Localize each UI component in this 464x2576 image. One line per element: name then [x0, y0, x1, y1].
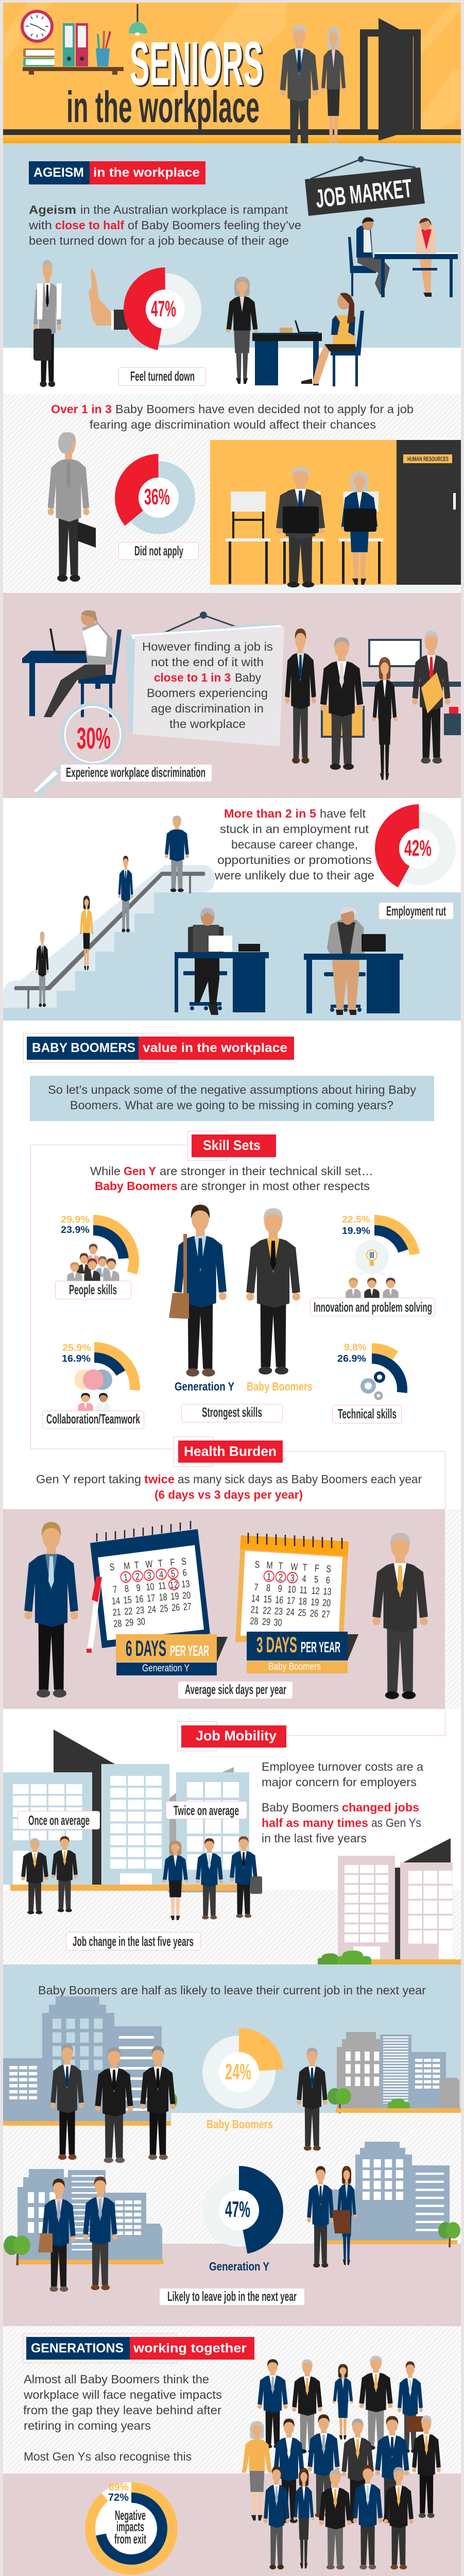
icon: stop hand — [89, 269, 128, 330]
text: ageism intro — [28, 203, 301, 247]
label: once on average: Once on average — [28, 1812, 90, 1828]
text: half as likely: Baby Boomers are half as likely to leave their current job in the next year — [38, 1984, 426, 1997]
calendar: baby boomers: S — [326, 1563, 332, 1574]
people climbing stairs — [36, 816, 189, 1007]
calendar: baby boomers: M — [266, 1560, 273, 1571]
panel: baby boomers value and skills — [3, 1021, 461, 1735]
scene: woman working at desk — [175, 908, 269, 1015]
text: note: close to 1 in 3 — [154, 671, 231, 684]
donut: negative impacts — [85, 2482, 178, 2575]
people: gen y pair — [38, 2176, 117, 2292]
calendar: gen y: F — [170, 1557, 175, 1568]
calendar: baby boomers: 20 — [322, 1597, 331, 1608]
heading: ageism — [26, 158, 205, 188]
calendar: gen y: 20 — [182, 1589, 191, 1601]
label: likely to leave — [160, 2289, 305, 2305]
calendar: baby boomers: 15 — [263, 1594, 272, 1605]
icon: wall clock — [22, 11, 52, 41]
calendar: gen y: 8 — [124, 1583, 129, 1595]
text: note: Baby — [235, 671, 261, 684]
text: more than 2 in 5: were unlikely due to their age — [214, 869, 374, 882]
label: people skills: People skills — [69, 1282, 117, 1297]
calendar: gen y: 21 — [112, 1606, 122, 1618]
calendar: baby boomers: 13 — [323, 1586, 332, 1597]
calendar: baby boomers: 22 — [263, 1605, 271, 1616]
calendar: gen y: 12 — [169, 1579, 178, 1591]
text: generations gap: Almost all Baby Boomers think the — [24, 2372, 209, 2386]
label: technical skills — [333, 1405, 402, 1423]
text: turnover: in the last five years — [262, 1832, 367, 1845]
text: generation legends: Generation Y — [175, 1380, 234, 1393]
heading: baby boomers — [24, 1033, 294, 1062]
calendar: baby boomers: T — [302, 1562, 307, 1573]
text: ageism intro: of Baby Boomers feeling they’ve — [128, 218, 301, 232]
heading: skill sets: Skill Sets — [203, 1138, 261, 1153]
text: sick days — [36, 1472, 422, 1501]
text: sick days: (6 days vs 3 days per year) — [154, 1488, 303, 1501]
label: experience workplace discrimination — [61, 765, 212, 782]
chart: technical skills: 9.8% — [344, 1342, 367, 1352]
scene: waiting room — [210, 440, 461, 593]
banner: 3 days per year — [247, 1632, 358, 1673]
icon: idea bulb — [355, 1240, 389, 1276]
panel: header: SENIORS — [131, 30, 265, 100]
text: sick days: twice — [144, 1472, 175, 1486]
calendar: gen y: M — [123, 1560, 130, 1572]
buildings: pink — [318, 1838, 461, 1964]
text: more than 2 in 5: More than 2 in 5 — [224, 807, 316, 820]
figure: gen y man — [24, 1522, 78, 1698]
text: turnover: major concern for employers — [262, 1775, 417, 1789]
calendar: gen y: 23 — [135, 1605, 145, 1616]
calendar: baby boomers: 12 — [311, 1585, 320, 1597]
figure: baby boomer — [246, 1208, 300, 1375]
donut: negative impacts: impacts — [116, 2519, 144, 2534]
chart: technical skills: 26.9% — [337, 1353, 366, 1364]
donut: 24 percent: 24% — [225, 2059, 251, 2084]
donut: 42 percent: 42% — [404, 836, 432, 861]
label: experience workplace discrimination: Experience workplace discrimination — [66, 765, 205, 780]
banner: 6 days per year: 6 DAYS — [126, 1636, 166, 1661]
text: note — [142, 640, 273, 731]
figure: generation y — [169, 1205, 227, 1377]
calendar: gen y: S — [109, 1562, 115, 1573]
calendar: gen y: 25 — [160, 1603, 168, 1614]
calendar: gen y: 3 — [147, 1570, 152, 1581]
text box: unpack assumptions: Boomers. What are we going to be missing in coming years? — [70, 1098, 393, 1112]
banner: 6 days per year: Generation Y — [142, 1663, 190, 1674]
banner: 3 days per year: 3 DAYS — [256, 1633, 297, 1657]
label: collaboration — [42, 1411, 144, 1428]
label: people skills — [56, 1281, 131, 1299]
text: generation y legend: Generation Y — [209, 2260, 269, 2273]
text: generations gap: from the gap they leave behind after — [23, 2403, 221, 2417]
text: turnover: as Gen Ys — [371, 1816, 421, 1829]
chart: people skills: 23.9% — [61, 1225, 90, 1235]
icon: three colleagues — [346, 1278, 399, 1298]
text: over 1 in 3: Baby Boomers have even decided not to apply for a job — [115, 402, 414, 416]
man walking away — [48, 432, 96, 582]
text: ageism intro: with — [28, 218, 52, 232]
heading: ageism: in the workplace — [93, 165, 200, 180]
label: did not apply — [118, 542, 199, 560]
calendar: gen y: 14 — [111, 1595, 121, 1607]
calendar: baby boomers: 27 — [321, 1608, 330, 1620]
text: note: However finding a job is — [142, 640, 273, 653]
calendar: baby boomers: 1 — [267, 1571, 271, 1582]
calendar: baby boomers: 7 — [254, 1582, 259, 1593]
man with briefcase — [33, 260, 62, 387]
calendar: gen y: W — [145, 1558, 153, 1570]
donut: 36 percent: 36% — [144, 484, 170, 510]
people: boomers walking — [21, 1836, 78, 1914]
label: likely to leave: Likely to leave job in the next year — [167, 2289, 297, 2304]
text: generations gap — [23, 2372, 222, 2463]
calendar: baby boomers: 10 — [287, 1584, 296, 1595]
heading: job mobility: Job Mobility — [196, 1728, 277, 1743]
title — [66, 28, 265, 132]
label: did not apply: Did not apply — [134, 543, 183, 558]
calendar: gen y: 28 — [113, 1618, 122, 1630]
people: gen y conversing — [307, 2166, 356, 2267]
calendar: gen y: 18 — [159, 1591, 167, 1603]
banner: 6 days per year: PER YEAR — [170, 1643, 209, 1659]
text: ageism intro: close to half — [55, 218, 124, 232]
calendar: baby boomers: 21 — [250, 1604, 259, 1616]
calendar: baby boomers: 14 — [251, 1593, 260, 1604]
label: average sick days: Average sick days per year — [185, 1682, 286, 1697]
label: technical skills: Technical skills — [338, 1406, 397, 1421]
text: gen y stronger: Gen Y — [124, 1164, 156, 1178]
figure: baby boomer man — [372, 1533, 428, 1699]
panel: health burden — [3, 1509, 461, 1709]
buildings: boomers right — [328, 2032, 461, 2113]
label: average sick days — [178, 1682, 293, 1699]
chairs — [226, 492, 383, 584]
text: over 1 in 3 — [51, 402, 414, 431]
donut: 24 percent — [202, 2036, 276, 2109]
text: over 1 in 3: fearing age discrimination would affect their chances — [90, 418, 376, 431]
label: feel turned down: Feel turned down — [130, 368, 195, 384]
calendar: baby boomers: 6 — [325, 1574, 331, 1586]
panel: likely to leave — [3, 1964, 461, 2326]
calendar: baby boomers: 24 — [286, 1606, 295, 1618]
panel: ageism — [3, 143, 461, 394]
scene: office staff group — [285, 629, 461, 780]
icon: magnifier 30 percent — [34, 705, 123, 797]
calendar: gen y: 22 — [124, 1605, 133, 1617]
calendar: baby boomers: W — [290, 1561, 298, 1572]
icon: gears — [363, 1373, 384, 1399]
text: more than 2 in 5: have felt — [320, 807, 366, 820]
label: once on average — [18, 1811, 100, 1829]
label: twice on average — [166, 1801, 247, 1819]
calendar: baby boomers: 30 — [273, 1617, 282, 1629]
calendar: baby boomers: 5 — [314, 1574, 319, 1585]
seated man with briefcase — [276, 467, 325, 587]
calendar: gen y: 26 — [171, 1602, 180, 1614]
banner: 6 days per year — [116, 1634, 228, 1675]
calendar: baby boomers: F — [314, 1563, 319, 1574]
people: crowd of staff — [242, 2355, 441, 2569]
donut: 47 percent gen y — [202, 2174, 276, 2247]
calendar: baby boomers: 26 — [310, 1608, 319, 1619]
calendar: gen y: 27 — [183, 1601, 192, 1613]
text: generation legends — [175, 1380, 313, 1393]
text box: unpack assumptions: So let’s unpack some of the negative assumptions about hiring Baby — [48, 1083, 417, 1096]
calendar: baby boomers: 28 — [250, 1615, 259, 1627]
text: note: not the end of it with — [151, 655, 264, 669]
figure: walking boomer — [297, 2047, 328, 2150]
icon: open door — [360, 18, 421, 141]
calendar: baby boomers: 18 — [298, 1596, 307, 1607]
icon: people group — [67, 1244, 119, 1281]
chart: collaboration — [42, 1343, 144, 1429]
chart: innovation: 22.5% — [342, 1214, 370, 1225]
text: note: age discrimination in — [151, 702, 264, 715]
calendar: gen y: 5 — [170, 1568, 176, 1580]
heading: generations: working together — [133, 2341, 247, 2355]
calendar: baby boomers: 3 — [290, 1572, 295, 1584]
icon: pencil cup — [96, 31, 111, 66]
icon: ceiling lamp — [129, 4, 147, 36]
donut: negative impacts: from exit — [114, 2531, 146, 2547]
text: sick days: as many sick days as Baby Boomers each year — [178, 1472, 422, 1486]
calendar: gen y: 10 — [146, 1581, 154, 1592]
buildings: gen y left — [4, 2169, 164, 2265]
people: gen y walking — [162, 1836, 262, 1920]
text: generations gap: retiring in coming years — [24, 2419, 151, 2432]
calendar: gen y: 4 — [159, 1569, 164, 1580]
chart: collaboration: 25.9% — [62, 1343, 91, 1353]
calendar: gen y: 13 — [181, 1578, 190, 1590]
label: feel turned down — [118, 368, 206, 385]
panel: header — [3, 3, 461, 153]
senior man and woman — [280, 25, 346, 153]
heading: generations — [23, 2334, 254, 2363]
calendar: baby boomers: 9 — [278, 1583, 282, 1595]
panel: did not apply — [3, 394, 461, 593]
calendar: baby boomers — [235, 1533, 349, 1642]
icon: books — [23, 48, 55, 66]
text: more than 2 in 5: opportunities or promotions — [217, 853, 372, 867]
chart: people skills — [53, 1214, 134, 1301]
donut: 47 percent — [129, 273, 201, 345]
calendar: gen y: 29 — [125, 1617, 134, 1629]
calendar: baby boomers: 19 — [311, 1597, 319, 1608]
donut: 47 percent: 47% — [151, 296, 176, 321]
text: turnover: changed jobs — [342, 1801, 419, 1814]
sign: job market — [305, 156, 425, 216]
calendar: gen y: S — [181, 1556, 187, 1567]
calendar: baby boomers: 29 — [262, 1616, 271, 1628]
text: more than 2 in 5: because career change, — [231, 838, 358, 851]
chart: innovation: 19.9% — [342, 1226, 370, 1236]
panel: workplace discrimination — [3, 593, 461, 798]
calendar: gen y: 11 — [158, 1580, 166, 1592]
calendar: baby boomers: T — [278, 1561, 283, 1572]
text: gen y stronger: Baby Boomers — [95, 1179, 178, 1193]
panel: generations working together — [3, 2326, 461, 2576]
calendar: gen y: 7 — [112, 1584, 117, 1595]
heading: health burden: Health Burden — [184, 1444, 277, 1459]
label: innovation — [310, 1298, 435, 1316]
heading: generations: GENERATIONS — [31, 2341, 124, 2355]
label: strongest skills: Strongest skills — [202, 1404, 262, 1420]
donut: negative impacts: Negative — [115, 2507, 146, 2523]
text: gen y stronger: While — [90, 1164, 121, 1178]
calendar: baby boomers: 25 — [298, 1607, 306, 1618]
calendar: gen y — [90, 1521, 210, 1648]
panel: job mobility — [3, 1709, 461, 1964]
calendar: gen y: T — [134, 1560, 139, 1571]
text: turnover — [262, 1760, 423, 1845]
calendar: gen y: 24 — [147, 1604, 157, 1615]
scene: woman at desk with job seeker — [226, 277, 364, 386]
text: gen y stronger: are stronger in their technical skill set… — [160, 1164, 373, 1178]
text: more than 2 in 5 — [214, 807, 374, 882]
calendar: gen y: 1 — [123, 1572, 128, 1583]
text: ageism intro: in the Australian workplace is rampant — [80, 203, 288, 216]
calendar: baby boomers: 23 — [274, 1605, 283, 1617]
calendar: baby boomers: 4 — [302, 1573, 306, 1584]
heading: job mobility — [177, 1722, 286, 1751]
calendar: baby boomers: 8 — [266, 1582, 271, 1594]
text: note: Boomers experiencing — [147, 686, 268, 700]
people: three boomers — [50, 2044, 176, 2163]
calendar: baby boomers: 11 — [299, 1584, 307, 1596]
calendar: baby boomers: 16 — [275, 1594, 284, 1606]
calendar: gen y: 9 — [136, 1582, 141, 1594]
chart: innovation — [310, 1214, 435, 1316]
scene: woman on headset at desk — [304, 907, 403, 1015]
text: over 1 in 3: Over 1 in 3 — [51, 402, 112, 416]
banner: 3 days per year: PER YEAR — [301, 1639, 340, 1656]
text: generations gap: workplace will face negative impacts — [23, 2388, 222, 2401]
calendar: gen y: 2 — [135, 1571, 140, 1582]
calendar: gen y: 30 — [136, 1616, 146, 1628]
icon: magnifier 30 percent: 30% — [77, 722, 111, 755]
chart: technical skills — [331, 1342, 413, 1430]
chart: people skills: 29.9% — [61, 1214, 90, 1225]
text: note: the workplace — [169, 717, 246, 731]
icon: speech bubbles — [74, 1369, 112, 1390]
icon: shelf — [23, 67, 124, 75]
donut: negative impacts: 72% — [108, 2492, 129, 2503]
label: twice on average: Twice on average — [174, 1803, 239, 1818]
text: baby boomers legend: Baby Boomers — [207, 2117, 273, 2131]
calendar: baby boomers: S — [254, 1559, 260, 1570]
seated woman with briefcase — [340, 471, 379, 585]
calendar: gen y: T — [158, 1557, 163, 1569]
title: in the workplace — [66, 83, 260, 132]
buildings: gen y right — [325, 2142, 460, 2247]
label: collaboration: Collaboration/Teamwork — [46, 1411, 140, 1427]
calendar: gen y: 15 — [123, 1594, 132, 1606]
donut: negative impacts: 89% — [109, 2482, 129, 2493]
text box: unpack assumptions — [30, 1076, 434, 1121]
buildings: city left — [3, 1730, 249, 1892]
text: gen y stronger — [90, 1164, 373, 1193]
text: generations gap: Most Gen Ys also recognise this — [24, 2450, 192, 2463]
text: turnover: Employee turnover costs are a — [262, 1760, 423, 1773]
text: more than 2 in 5: stuck in an employment rut — [220, 822, 369, 836]
text: ageism intro: Ageism — [29, 203, 76, 216]
stairs — [3, 865, 461, 1021]
calendar: gen y: 19 — [170, 1590, 179, 1602]
panel: employment rut — [3, 798, 461, 1021]
heading: health burden — [174, 1436, 283, 1466]
calendar: gen y: 6 — [182, 1567, 187, 1579]
text: sick days: Gen Y report taking — [36, 1472, 141, 1486]
note paper with text — [126, 612, 284, 747]
calendar: baby boomers: 17 — [286, 1595, 296, 1606]
heading: skill sets — [187, 1131, 276, 1160]
icon: binders — [63, 23, 88, 66]
calendar: gen y: 17 — [146, 1592, 156, 1604]
scene: man at laptop — [22, 610, 122, 717]
icon: marker pen — [87, 1577, 102, 1653]
panel: header: SENIORS — [130, 28, 263, 98]
label: job change: Job change in the last five years — [73, 1934, 194, 1949]
heading: baby boomers: value in the workplace — [143, 1041, 287, 1055]
label: strongest skills — [181, 1404, 282, 1422]
label: job change — [66, 1932, 201, 1951]
donut: 47 percent gen y: 47% — [225, 2197, 250, 2222]
text: ageism intro: been turned down for a job because of their age — [29, 234, 289, 247]
icon: two colleagues — [78, 1393, 111, 1411]
scene: job interview — [348, 217, 458, 297]
text: turnover: Baby Boomers — [262, 1801, 339, 1814]
text: turnover: half as many times — [262, 1816, 368, 1829]
donut: 36 percent — [122, 461, 195, 534]
heading: ageism: AGEISM — [33, 165, 84, 180]
banner: 3 days per year: Baby Boomers — [268, 1662, 321, 1672]
buildings: boomers left — [3, 1996, 177, 2126]
text: gen y stronger: are stronger in most other respects — [180, 1179, 370, 1193]
donut: 42 percent — [383, 812, 456, 885]
calendar: baby boomers: 2 — [278, 1572, 283, 1583]
heading: baby boomers: BABY BOOMERS — [32, 1041, 135, 1055]
text: generation legends: Baby Boomers — [247, 1380, 313, 1393]
chart: collaboration: 16.9% — [62, 1353, 91, 1364]
calendar: gen y: 16 — [135, 1594, 144, 1605]
